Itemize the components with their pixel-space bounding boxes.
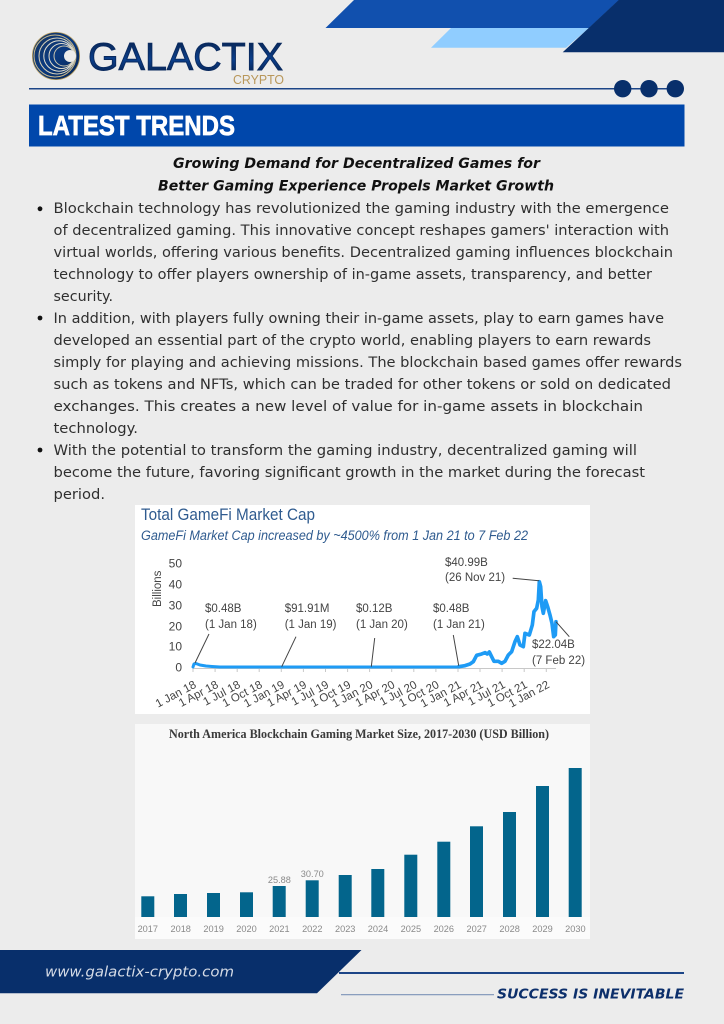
x axis labels: 1 Jul 21 — [466, 679, 508, 709]
annotations: (26 Nov 21) — [445, 572, 505, 584]
year labels: 2027 — [466, 924, 487, 934]
annotations: (1 Jan 19) — [285, 619, 337, 631]
wordmark: GALACTIX — [88, 36, 283, 79]
year labels: 2019 — [203, 924, 224, 934]
annotations: (1 Jan 21) — [433, 619, 485, 631]
annotations: (1 Jan 18) — [205, 619, 257, 631]
annotations: $0.48B — [205, 603, 242, 615]
text block: bullet 3: period. — [54, 487, 105, 503]
y axis labels — [152, 556, 182, 674]
annotations: $22.04B — [532, 639, 575, 651]
header rule with three dots — [29, 80, 684, 97]
value labels — [268, 869, 324, 885]
icon: concentric ring globe — [32, 32, 80, 80]
annotations: $91.91M — [285, 603, 329, 615]
panel: GameFi market cap line chart — [135, 505, 590, 714]
footer slogan: SUCCESS IS INEVITABLE — [497, 986, 685, 1002]
subheading — [158, 156, 554, 194]
annotations: $0.12B — [356, 603, 393, 615]
annotations: $0.48B — [433, 603, 470, 615]
logo: Galactix Crypto — [32, 32, 284, 87]
year labels: 2022 — [302, 924, 323, 934]
x axis labels: 1 Jan 20 — [330, 679, 375, 710]
value labels: 25.88 — [268, 875, 291, 885]
subheading: Growing Demand for Decentralized Games for — [173, 156, 541, 172]
year labels: 2030 — [565, 924, 586, 934]
x axis labels: 1 Jul 20 — [378, 679, 419, 709]
text block: bullet 2: simply for playing and achieving missions. The blockchain based games offer rewards — [54, 355, 682, 371]
text block: bullet 1 — [38, 201, 673, 305]
chart title: North America Blockchain Gaming Market Size, 2017-2030 (USD Billion) — [169, 727, 549, 741]
year labels: 2017 — [138, 924, 158, 934]
footer: website ribbon: www.galactix-crypto.com — [45, 964, 234, 980]
x axis labels: 1 Apr 21 — [442, 679, 485, 710]
footer rules — [339, 973, 684, 995]
text block: bullet 2: technology. — [54, 421, 138, 437]
y axis labels: 40 — [169, 578, 182, 592]
year labels: 2028 — [499, 924, 520, 934]
header decorative shapes — [326, 0, 724, 52]
chart title: Total GameFi Market Cap — [141, 506, 315, 524]
x axis labels: 1 Apr 19 — [265, 679, 309, 710]
year labels: 2021 — [269, 924, 290, 934]
text block: bullet 3 — [38, 443, 646, 503]
text block: bullet 1: technology to offer players ownership of in-game assets, transparency, and better — [54, 267, 652, 283]
text block: bullet 1: Blockchain technology has revolutionized the gaming industry with the emergence — [54, 201, 669, 217]
annotation leader lines — [195, 578, 569, 667]
x axis labels: 1 Oct 19 — [309, 679, 353, 710]
x axis labels: 1 Jul 19 — [290, 679, 331, 709]
text block: bullet 2: developed an essential part of the crypto world, enabling players to earn rewards — [54, 333, 651, 349]
banner: latest trends — [29, 104, 684, 146]
annotations: $40.99B — [445, 557, 488, 569]
year labels: 2026 — [434, 924, 454, 934]
panel: North America market size bar chart — [135, 724, 590, 939]
bars — [141, 768, 582, 917]
subheading: Better Gaming Experience Propels Market Growth — [158, 178, 554, 194]
axis baseline — [135, 917, 590, 939]
footer: website ribbon — [0, 950, 362, 993]
annotations — [205, 557, 585, 667]
text block: bullet 3: With the potential to transform the gaming industry, decentralized gaming will — [54, 443, 637, 459]
x axis labels: 1 Oct 18 — [221, 679, 265, 710]
year labels: 2020 — [236, 924, 257, 934]
annotations: (7 Feb 22) — [532, 655, 585, 667]
x axis labels — [154, 679, 552, 710]
year labels — [138, 924, 586, 934]
x axis labels: 1 Jan 19 — [242, 679, 287, 710]
year labels: 2029 — [532, 924, 553, 934]
text block: bullet 2: In addition, with players fully owning their in-game assets, play to earn games have — [54, 311, 664, 327]
x axis labels: 1 Jan 18 — [154, 679, 198, 710]
tagline: CRYPTO — [233, 73, 284, 87]
text block: bullet 1: virtual worlds, offering various benefits. Decentralized gaming influences blockchain — [54, 245, 673, 261]
year labels: 2023 — [335, 924, 355, 934]
value labels: 30.70 — [301, 869, 324, 879]
x axis labels: 1 Oct 21 — [486, 679, 530, 710]
x axis — [193, 668, 556, 672]
x axis labels: 1 Jan 22 — [507, 679, 552, 710]
annotations: (1 Jan 20) — [356, 619, 408, 631]
text block: bullet 2: exchanges. This creates a new level of value for in-game assets in blockchain — [54, 399, 643, 415]
x axis labels: 1 Apr 20 — [354, 679, 397, 710]
x axis labels: 1 Apr 18 — [177, 679, 221, 710]
year labels: 2025 — [401, 924, 421, 934]
y axis labels: 0 — [175, 660, 182, 674]
y axis labels: 10 — [169, 640, 182, 654]
text block: bullet 2 — [38, 311, 682, 437]
x axis labels: 1 Oct 20 — [397, 679, 441, 710]
banner: latest trends: LATEST TRENDS — [38, 110, 235, 141]
year labels: 2024 — [368, 924, 388, 934]
text block: bullet 3: become the future, favoring significant growth in the market during the forecast — [54, 465, 646, 481]
y axis labels: 30 — [169, 598, 182, 612]
y axis labels: Billions — [152, 570, 164, 607]
year labels: 2018 — [170, 924, 191, 934]
x axis labels: 1 Jan 21 — [419, 679, 463, 710]
x axis labels: 1 Jul 18 — [201, 679, 243, 709]
text block: bullet 1: security. — [54, 289, 113, 305]
market cap line — [193, 582, 556, 667]
chart subtitle: GameFi Market Cap increased by ~4500% from 1 Jan 21 to 7 Feb 22 — [141, 528, 528, 543]
text block: bullet 1: of decentralized gaming. This innovative concept reshapes gamers' interaction with — [54, 223, 669, 239]
y axis labels: 50 — [169, 556, 182, 570]
y axis labels: 20 — [169, 620, 182, 634]
text block: bullet 2: such as tokens and NFTs, which can be traded for other tokens or sold on dedicated — [54, 377, 671, 393]
